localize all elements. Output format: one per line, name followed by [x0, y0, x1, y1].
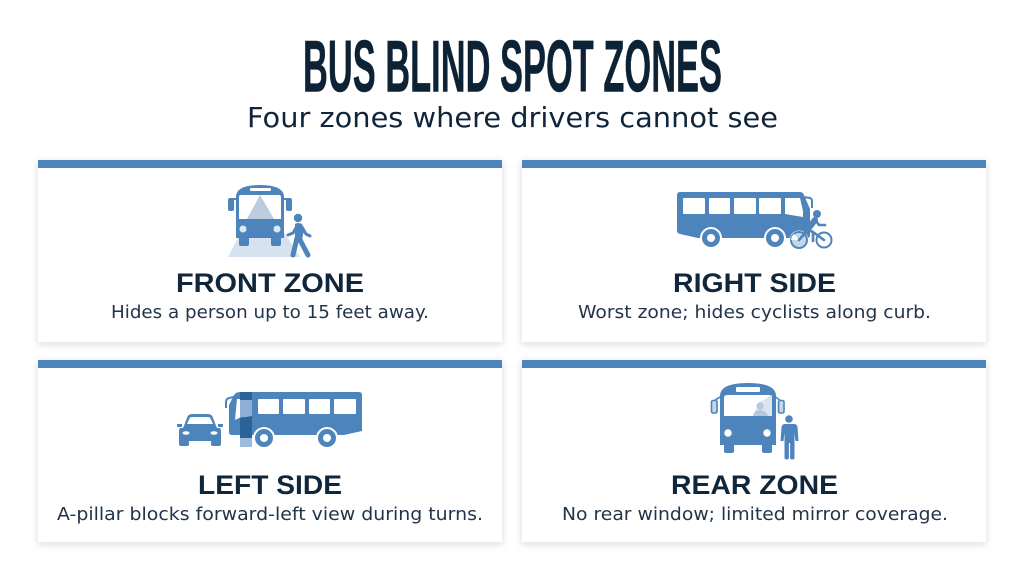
- panel: front zone: [38, 160, 502, 342]
- panel: right side: [522, 160, 986, 342]
- heading: right side: RIGHT SIDE: [673, 268, 836, 298]
- description: left side: A-pillar blocks forward-left view during turns.: [57, 504, 483, 525]
- heading: left side: LEFT SIDE: [198, 470, 342, 500]
- icon: bus front with pedestrian: [228, 185, 310, 257]
- icon: side bus with cyclist: [677, 192, 832, 250]
- subtitle: Four zones where drivers cannot see: [247, 101, 778, 134]
- heading: front zone: FRONT ZONE: [176, 268, 364, 298]
- panel: left side: [38, 360, 502, 542]
- heading: rear zone: REAR ZONE: [671, 470, 838, 500]
- icon: car beside bus with pillar: [177, 392, 362, 449]
- panel: rear zone: [522, 360, 986, 542]
- description: right side: Worst zone; hides cyclists along curb.: [578, 302, 931, 323]
- description: rear zone: No rear window; limited mirror coverage.: [562, 504, 948, 525]
- description: front zone: Hides a person up to 15 feet away.: [111, 302, 429, 323]
- icon: bus rear with person: [712, 383, 798, 460]
